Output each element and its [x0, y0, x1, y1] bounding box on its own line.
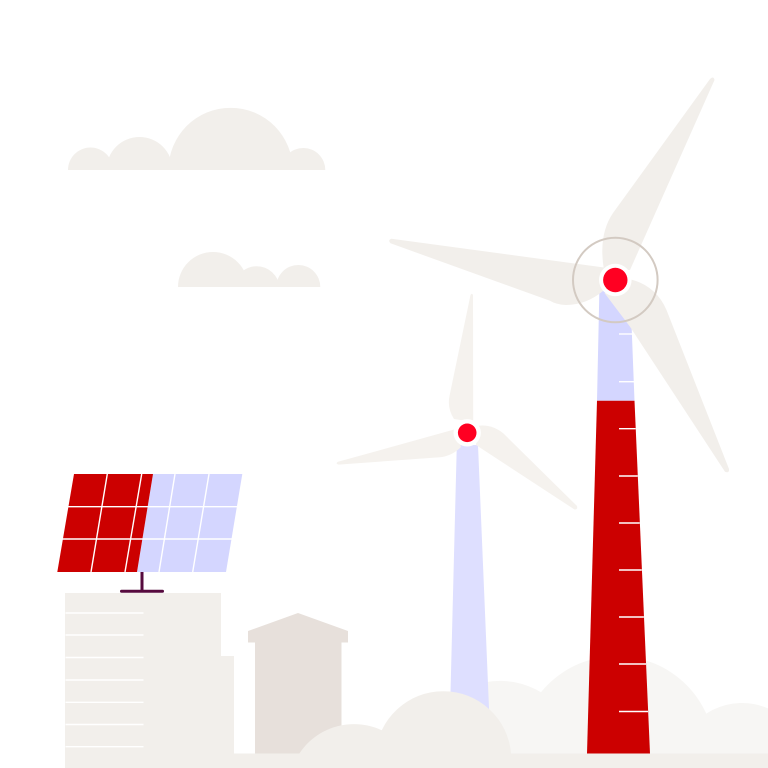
building floor lines: [66, 613, 144, 747]
small turbine tower: [450, 445, 490, 720]
cloud: upper left: [68, 108, 325, 170]
large turbine hub: [599, 264, 632, 296]
large turbine highlight ring: [573, 238, 658, 322]
large wind turbine: [389, 77, 729, 754]
small turbine hub: [454, 419, 481, 446]
cloud: middle: [178, 252, 320, 287]
gauge empty portion: [597, 285, 634, 401]
solar panel grid: [60, 474, 240, 572]
foreground bushes: [299, 691, 511, 754]
solar panel stand: [122, 572, 162, 591]
small turbine blades: [337, 294, 577, 510]
gauge filled portion: [587, 401, 650, 754]
gauge tick marks: [619, 334, 648, 712]
large turbine blades: [389, 77, 729, 472]
solar panel empty portion: [137, 474, 242, 572]
building with floors: [65, 593, 768, 768]
solar panel filled portion: [57, 474, 153, 572]
house: [248, 613, 348, 754]
background bushes: [420, 656, 768, 754]
large turbine tower: capacity gauge: [587, 285, 650, 754]
solar panel: [57, 474, 242, 591]
small wind turbine: [337, 294, 577, 720]
ground and building: [65, 593, 768, 768]
